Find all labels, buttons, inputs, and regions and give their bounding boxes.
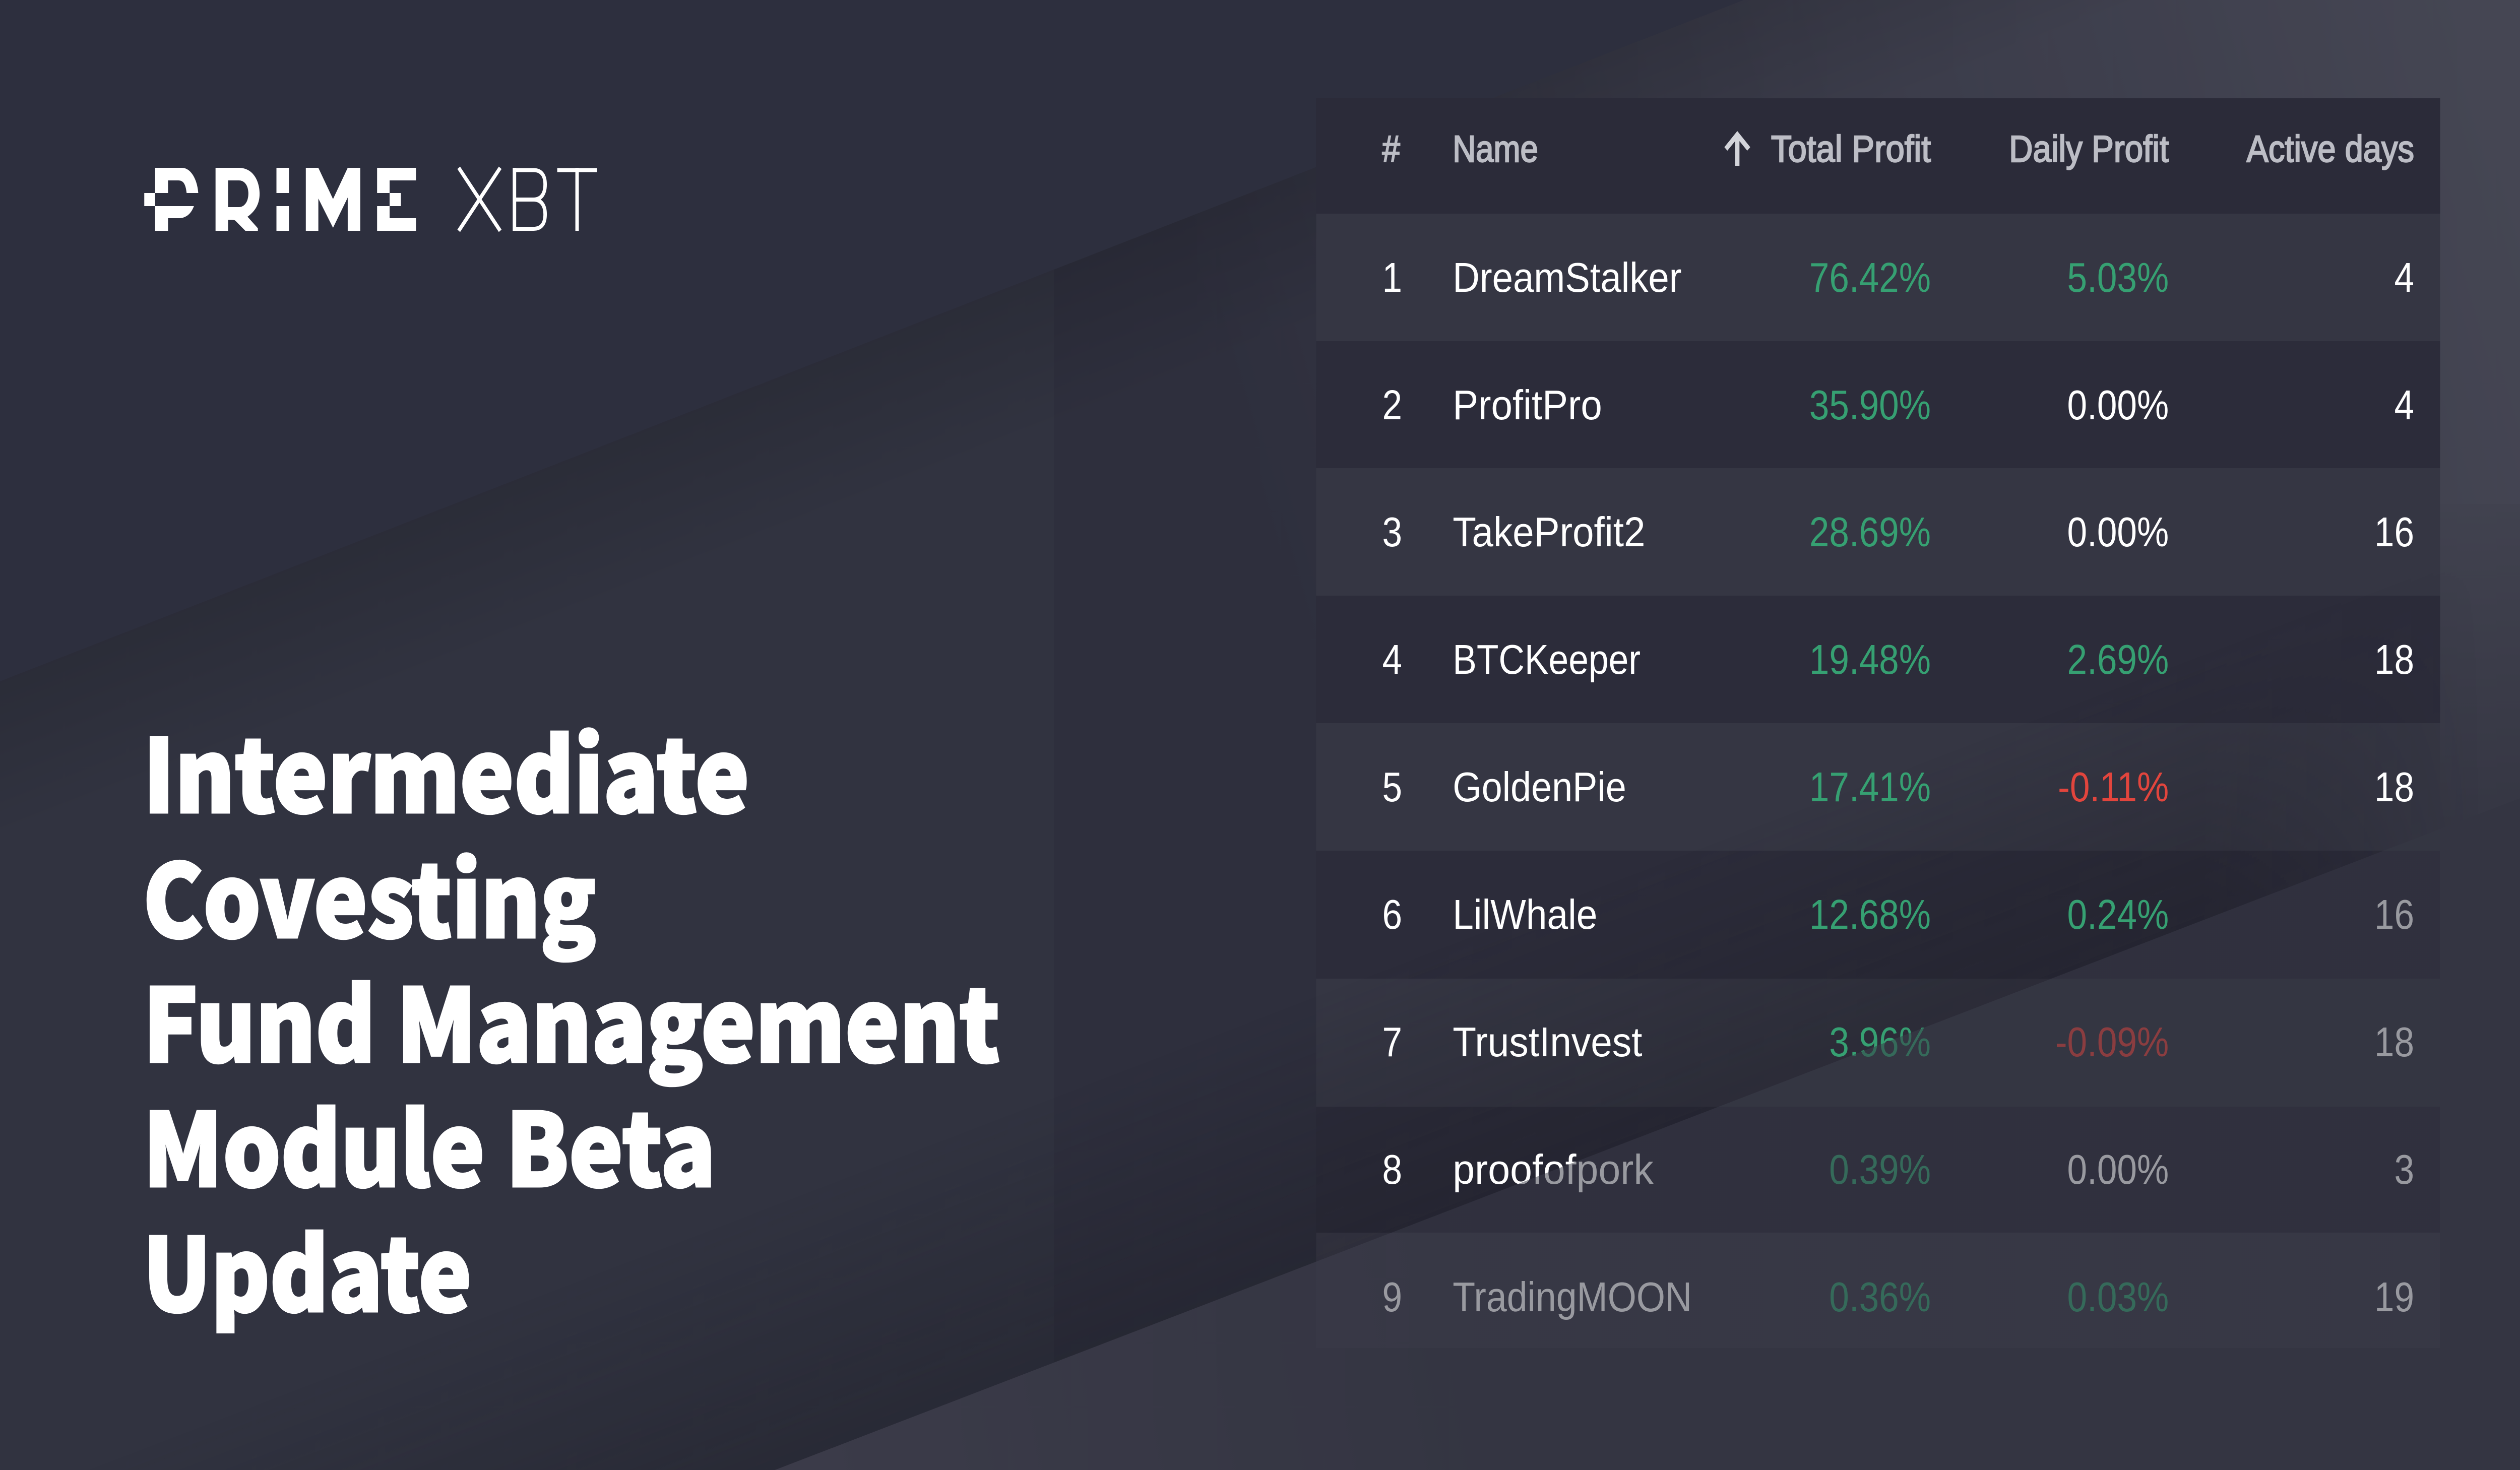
row 5: GoldenPie <box>1453 764 1626 810</box>
row 2: 0.00% <box>2067 382 2169 428</box>
row 8: 8 <box>1382 1146 1402 1193</box>
row 4: 19.48% <box>1809 636 1931 683</box>
row 4: 18 <box>2374 636 2414 683</box>
title: Covesting <box>143 820 596 967</box>
table header <box>1382 128 2414 170</box>
logo: PrimeXBT <box>144 168 597 231</box>
row 4 <box>1382 636 2414 683</box>
row 6: 6 <box>1382 891 1402 938</box>
icon: sort arrow <box>1724 131 1750 166</box>
row 7: 7 <box>1382 1019 1402 1065</box>
row 7: 3.96% <box>1829 1019 1931 1065</box>
row 8 <box>1382 1146 2414 1193</box>
row 5: -0.11% <box>2058 764 2169 810</box>
row 5: 18 <box>2374 764 2414 810</box>
row 3: 16 <box>2374 509 2414 555</box>
table header: # <box>1382 128 1400 170</box>
row 6: 16 <box>2374 891 2414 938</box>
row 8: 0.00% <box>2067 1146 2169 1193</box>
table rows <box>1316 98 2440 1348</box>
row 7 <box>1382 1019 2414 1065</box>
row 1: 76.42% <box>1809 254 1931 301</box>
table header: Name <box>1453 128 1538 170</box>
row 3: 0.00% <box>2067 509 2169 555</box>
translucent diagonal overlay <box>775 798 2520 1470</box>
row 8: proofofpork <box>1453 1146 1654 1193</box>
table header: Daily Profit <box>2009 128 2169 170</box>
row 5: 5 <box>1382 764 1402 810</box>
title: Fund Management <box>143 945 1000 1091</box>
row 6: 12.68% <box>1809 891 1931 938</box>
dark shadow above lower diagonal <box>594 817 2265 1470</box>
row 8: 0.39% <box>1829 1146 1931 1193</box>
row 3: 3 <box>1382 509 1402 555</box>
row 5 <box>1382 764 2414 810</box>
row 2: 2 <box>1382 382 1402 428</box>
row 8: 3 <box>2394 1146 2414 1193</box>
row 4: BTCKeeper <box>1453 636 1641 683</box>
row 6 <box>1382 891 2414 938</box>
row 9: TradingMOON <box>1453 1274 1692 1320</box>
row 3: TakeProfit2 <box>1453 509 1645 555</box>
title <box>143 695 1000 1340</box>
row 9 <box>1382 1274 2414 1320</box>
title: Update <box>143 1194 472 1340</box>
row 1: 1 <box>1382 254 1402 301</box>
row 2: 35.90% <box>1809 382 1931 428</box>
row 2: ProfitPro <box>1453 382 1602 428</box>
table header: Total Profit <box>1771 128 1931 170</box>
row 6: 0.24% <box>2067 891 2169 938</box>
row 9: 9 <box>1382 1274 1402 1320</box>
title: Intermediate <box>143 695 749 842</box>
row 5: 17.41% <box>1809 764 1931 810</box>
row 1: 5.03% <box>2067 254 2169 301</box>
row 2: 4 <box>2394 382 2414 428</box>
row 9: 0.36% <box>1829 1274 1931 1320</box>
title: Module Beta <box>143 1069 716 1216</box>
row 3: 28.69% <box>1809 509 1931 555</box>
row 6: LilWhale <box>1453 891 1597 938</box>
row 9: 19 <box>2374 1274 2414 1320</box>
row 7: 18 <box>2374 1019 2414 1065</box>
table header: Active days <box>2246 128 2414 170</box>
row 2 <box>1382 382 2414 428</box>
row 3 <box>1382 509 2414 555</box>
row 4: 2.69% <box>2067 636 2169 683</box>
row 1 <box>1382 254 2414 301</box>
row 7: -0.09% <box>2055 1019 2169 1065</box>
row 1: 4 <box>2394 254 2414 301</box>
row 4: 4 <box>1382 636 1402 683</box>
row 9: 0.03% <box>2067 1274 2169 1320</box>
row 7: TrustInvest <box>1453 1019 1642 1065</box>
row 1: DreamStalker <box>1453 254 1681 301</box>
